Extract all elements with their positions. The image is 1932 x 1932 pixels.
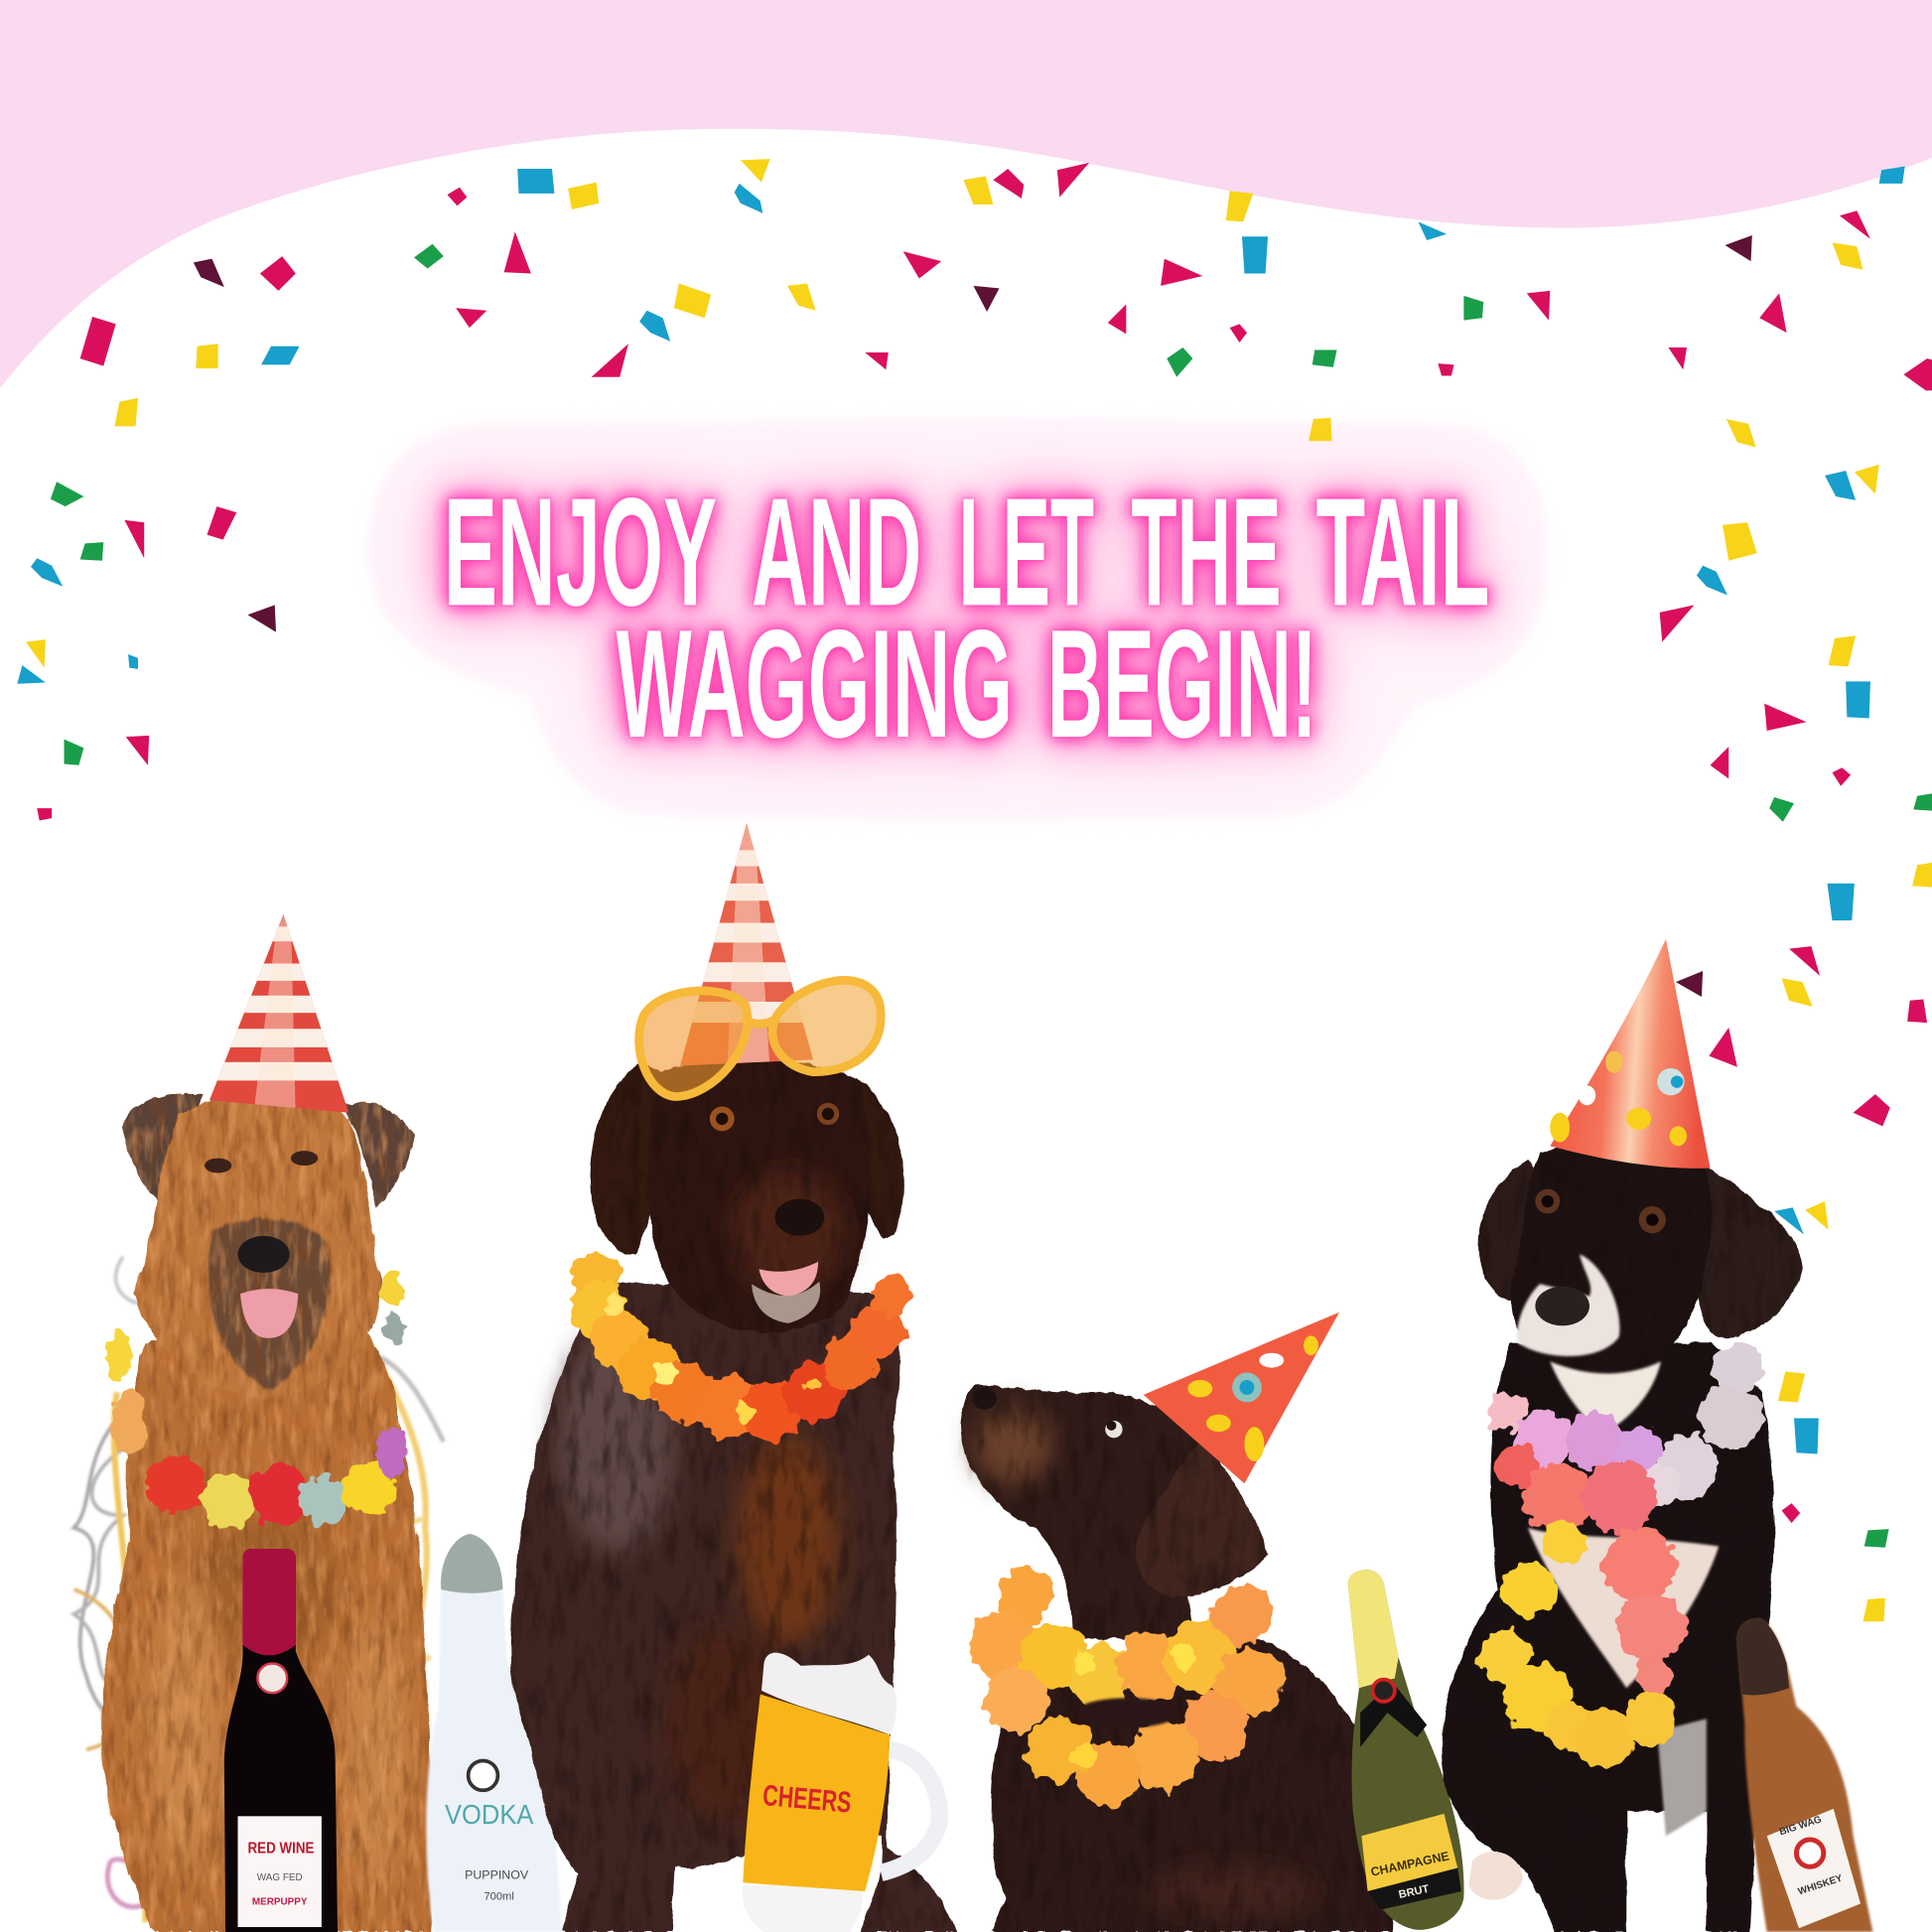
toy: hot sauce bottle: [1737, 1619, 1872, 1932]
terrier party hat: [209, 914, 348, 1113]
toy: red wine bottle: RED WINE: [247, 1840, 315, 1858]
headline neon text: ENJOY: [444, 466, 717, 637]
spaniel chest and paw markings: [1528, 1528, 1719, 1688]
dachshund party hat: [1144, 1312, 1339, 1483]
retriever ears: [591, 1062, 661, 1255]
toy: vodka bottle: VODKA: [445, 1799, 534, 1830]
streamers behind terrier: [73, 1257, 444, 1922]
toy: vodka bottle: 700ml: [483, 1891, 514, 1903]
dachshund lei: [970, 1569, 1285, 1806]
spaniel pink and yellow lei: [1478, 1391, 1686, 1767]
dachshund head: [961, 1386, 1268, 1639]
retriever party hat: [680, 823, 813, 1066]
confetti: [17, 159, 1932, 1621]
retriever orange lei: [569, 1251, 911, 1441]
terrier fur group: [101, 1093, 431, 1932]
terrier ears: [122, 1093, 204, 1205]
dachshund ear: [1137, 1442, 1268, 1596]
dog 4: black and white spaniel mix: [1442, 939, 1803, 1932]
headline neon text: THE: [1131, 466, 1282, 637]
retriever head: [647, 1059, 870, 1332]
toy: champagne bottle: CHAMPAGNE: [1369, 1849, 1450, 1879]
toy: red wine bottle: WAG FED: [257, 1872, 303, 1883]
spaniel body: [1442, 1343, 1774, 1932]
terrier head: [133, 1097, 382, 1399]
toy: champagne bottle: BRUT: [1398, 1883, 1431, 1901]
retriever body: [510, 1282, 956, 1932]
dachshund eye and nose: [1105, 1421, 1123, 1438]
dachshund fur group: [961, 1386, 1399, 1932]
soft glow backdrop behind headline: [367, 419, 1548, 821]
terrier body: [101, 1307, 431, 1932]
toy: beer mug: CHEERS: [761, 1779, 853, 1820]
oversized orange sunglasses: [639, 980, 881, 1097]
headline neon text: AND: [752, 466, 921, 637]
spaniel head: [1511, 1147, 1712, 1375]
dog 2: brown retriever with hat and glasses: [510, 819, 956, 1932]
retriever fur group: [510, 1059, 956, 1932]
terrier lei: [107, 1268, 407, 1528]
toy: hot sauce bottle: WHISKEY: [1797, 1872, 1845, 1897]
toy: red wine bottle: [224, 1549, 338, 1932]
spaniel white muzzle and chest blaze: [1517, 1254, 1619, 1356]
toy: vodka bottle: PUPPINOV: [465, 1868, 529, 1882]
retriever face: [710, 1106, 735, 1131]
dog 1: terrier with party hat, lei and streamers: [73, 911, 444, 1932]
headline neon text: LET: [959, 466, 1094, 637]
spaniel ears: [1478, 1161, 1543, 1302]
toy: beer mug: [743, 1653, 939, 1932]
spaniel white lei: [1635, 1343, 1763, 1507]
terrier face: [205, 1159, 231, 1173]
dachshund body: [991, 1639, 1399, 1932]
headline neon text: TAIL: [1315, 466, 1489, 637]
toy: champagne bottle: [1348, 1570, 1464, 1930]
spaniel party hat: [1550, 939, 1711, 1169]
dog 3: dachshund looking up: [961, 1312, 1399, 1932]
pink wave header: [0, 0, 1932, 388]
headline neon text: BEGIN!: [1047, 598, 1317, 769]
headline neon text: WAGGING: [617, 598, 1013, 769]
toy: hot sauce bottle: BIG WAG: [1778, 1814, 1824, 1838]
spaniel face: [1535, 1189, 1560, 1213]
dark gap inside dachshund lei: [1075, 1698, 1179, 1727]
headline neon text: [444, 466, 1489, 769]
spaniel fur group: [1442, 1147, 1803, 1932]
toy: red wine bottle: MERPUPPY: [252, 1897, 308, 1908]
toy: vodka bottle: [426, 1534, 562, 1932]
